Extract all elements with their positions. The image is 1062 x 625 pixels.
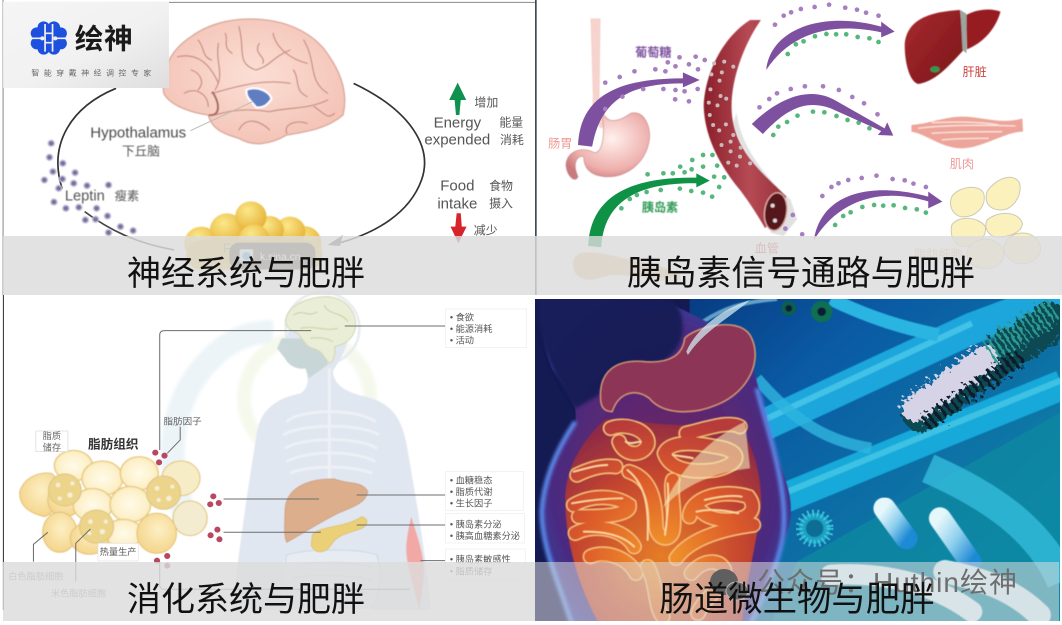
icon: human body xyxy=(232,292,431,610)
logo wordmark: 绘神 xyxy=(75,24,133,55)
list box: insulin sensitivity xyxy=(445,549,525,580)
icon: fat tissue xyxy=(184,201,323,270)
arrow: glucose from gut xyxy=(578,72,700,147)
list box: insulin sensitivity: • 脂质储存 xyxy=(450,565,492,576)
icon: liver xyxy=(905,9,1000,84)
caption band: digestive system: 消化系统与肥胖 xyxy=(127,581,365,619)
list box: metabolism: • 脂质代谢 xyxy=(450,486,492,497)
list box: metabolism xyxy=(445,472,523,510)
watermark: wechat account: 公众号：Huthin绘神 xyxy=(757,567,1018,598)
icon: logo flower xyxy=(31,21,67,55)
food intake block: 摄入 xyxy=(489,196,513,210)
list box: hormone secretion: • 胰岛素分泌 xyxy=(450,518,502,529)
energy expended block: expended xyxy=(424,133,490,149)
energy expended block: 消耗 xyxy=(500,133,524,147)
dark upper chest xyxy=(535,295,683,408)
label: beige adipocyte: 米色脂肪细胞 xyxy=(51,588,106,599)
label: gut: 肠胃 xyxy=(548,137,572,151)
icon: belly glow edge xyxy=(542,388,784,625)
label: adipokines: 脂肪因子 xyxy=(163,416,202,428)
icon: fat cells xyxy=(950,177,1040,269)
icon: large bacterium xyxy=(915,308,1056,423)
caption band: gut microbiome xyxy=(535,562,1059,621)
label: hypothalamus xyxy=(90,126,186,158)
label: hypothalamus: Hypothalamus xyxy=(90,126,186,142)
watermark pill: k.sina.cn: k.sina.cn xyxy=(260,252,300,263)
food intake block: 减少 xyxy=(474,223,498,237)
list box: metabolism: • 血糖稳态 xyxy=(450,474,492,485)
food intake block xyxy=(437,179,513,243)
light teal lower area xyxy=(770,412,1062,625)
icon: spiky microbe xyxy=(799,513,830,544)
caption band: insulin signalling xyxy=(535,236,1062,295)
arrow: brain to fat tissue arc xyxy=(328,83,425,246)
energy expended block: Energy xyxy=(434,115,482,131)
particles in vessel xyxy=(707,60,752,168)
label: white adipocyte: 白色脂肪细胞 xyxy=(8,571,63,582)
arrow: fat tissue to leptin arc xyxy=(85,212,174,250)
list box: hormone secretion: • 胰高血糖素分泌 xyxy=(450,530,520,541)
light streak over intestines xyxy=(663,422,750,508)
icon: red down arrow xyxy=(451,213,467,243)
label: thermogenesis: 热量生产 xyxy=(100,546,136,557)
glucose particles xyxy=(603,2,928,237)
icon: pill bacteria xyxy=(831,508,1039,615)
label: lipid storage: 储存 xyxy=(43,441,61,452)
label: thermogenesis xyxy=(98,543,138,561)
list box: metabolism: • 生长因子 xyxy=(450,498,492,509)
label: muscle: 肌肉 xyxy=(950,157,974,171)
list box: appetite xyxy=(445,309,527,348)
label: fat tissue: Fat tissue xyxy=(223,240,282,255)
arrow: insulin from pancreas xyxy=(588,173,710,247)
label: lipid storage xyxy=(36,430,68,452)
logo box xyxy=(3,2,169,88)
dark left background xyxy=(535,295,690,625)
watermark pill: k.sina.cn xyxy=(229,243,315,269)
label: pancreas: 胰腺 xyxy=(657,268,682,282)
label: lipid storage: 脂质 xyxy=(43,430,61,441)
energy expended block xyxy=(424,83,524,149)
food intake block: intake xyxy=(437,196,477,212)
energy expended block: 能量 xyxy=(499,116,523,130)
bright tubes xyxy=(703,295,1062,582)
icon: green up arrow xyxy=(449,83,466,115)
label: leptin: Leptin xyxy=(65,189,105,205)
background rings xyxy=(173,332,370,528)
caption band: nervous system xyxy=(3,236,535,295)
list box: insulin sensitivity: • 胰岛素敏感性 xyxy=(450,554,511,565)
label: fat cells: 脂肪细胞 xyxy=(914,246,962,261)
connector lines xyxy=(160,326,445,589)
label: adipose tissue: 脂肪组织 xyxy=(88,436,139,451)
caption band: nervous system: 神经系统与肥胖 xyxy=(127,255,365,293)
panel left edge xyxy=(2,295,5,610)
label: leptin xyxy=(65,188,139,205)
list box: hormone secretion xyxy=(445,514,525,543)
label: hypothalamus: 下丘脑 xyxy=(122,144,160,158)
logo tagline: 智能穿戴神经调控专家 xyxy=(31,67,156,77)
label: glucose: 葡萄糖 xyxy=(635,45,671,60)
icon: abdomen silhouette xyxy=(540,299,791,625)
icon: small viruses top xyxy=(781,301,832,322)
icon: muscle xyxy=(911,117,1023,148)
icon: pancreas xyxy=(311,517,367,552)
icon: stomach xyxy=(600,325,755,412)
icon: brain xyxy=(163,19,345,144)
label: blood vessel: 血管 xyxy=(755,240,779,255)
panel: digestive system xyxy=(3,292,527,610)
adipocyte leader lines xyxy=(33,529,90,582)
blue background xyxy=(535,295,1062,625)
panel: nervous system xyxy=(3,0,535,295)
icon: adipose cell cluster xyxy=(20,450,207,554)
list box: appetite: • 食欲 xyxy=(450,311,474,322)
leptin particles xyxy=(41,140,136,236)
arrow: leptin to brain arc xyxy=(58,88,116,189)
panel frame lines xyxy=(3,0,535,295)
panel left edge xyxy=(535,0,537,295)
food intake block: 食物 xyxy=(489,179,513,193)
arrow: to muscle xyxy=(752,94,893,136)
icon: muscle xyxy=(406,517,424,610)
label: liver: 肝脏 xyxy=(963,64,987,79)
arrow: to fat cells xyxy=(814,190,942,240)
caption band: digestive system xyxy=(3,562,535,621)
food intake block: Food xyxy=(440,179,474,195)
panel: gut microbiome xyxy=(535,295,1062,625)
caption band: gut microbiome: 肠道微生物与肥胖 xyxy=(659,581,935,619)
insulin particles xyxy=(619,32,928,227)
icon: pancreas xyxy=(573,252,676,280)
icon: beige adipocytes xyxy=(48,474,181,543)
label: leptin: 瘦素 xyxy=(115,188,139,203)
caption band: insulin signalling: 胰岛素信号通路与肥胖 xyxy=(627,254,975,293)
arrow: to liver xyxy=(766,21,895,70)
icon: brain xyxy=(286,297,356,363)
icon: stomach highlight xyxy=(686,300,750,355)
energy expended block: 增加 xyxy=(474,96,498,110)
adipokine dots xyxy=(152,450,223,569)
callout line: hypothalamus xyxy=(190,102,253,131)
list box: appetite: • 活动 xyxy=(450,335,474,346)
panel: insulin signalling xyxy=(535,0,1040,295)
icon: intestines xyxy=(565,417,761,625)
icon: esophagus and stomach xyxy=(566,18,650,179)
list box: appetite: • 能源消耗 xyxy=(450,323,492,334)
icon: liver xyxy=(285,479,368,542)
icon: blood vessel xyxy=(704,20,797,236)
label: insulin: 胰岛素 xyxy=(642,199,678,214)
